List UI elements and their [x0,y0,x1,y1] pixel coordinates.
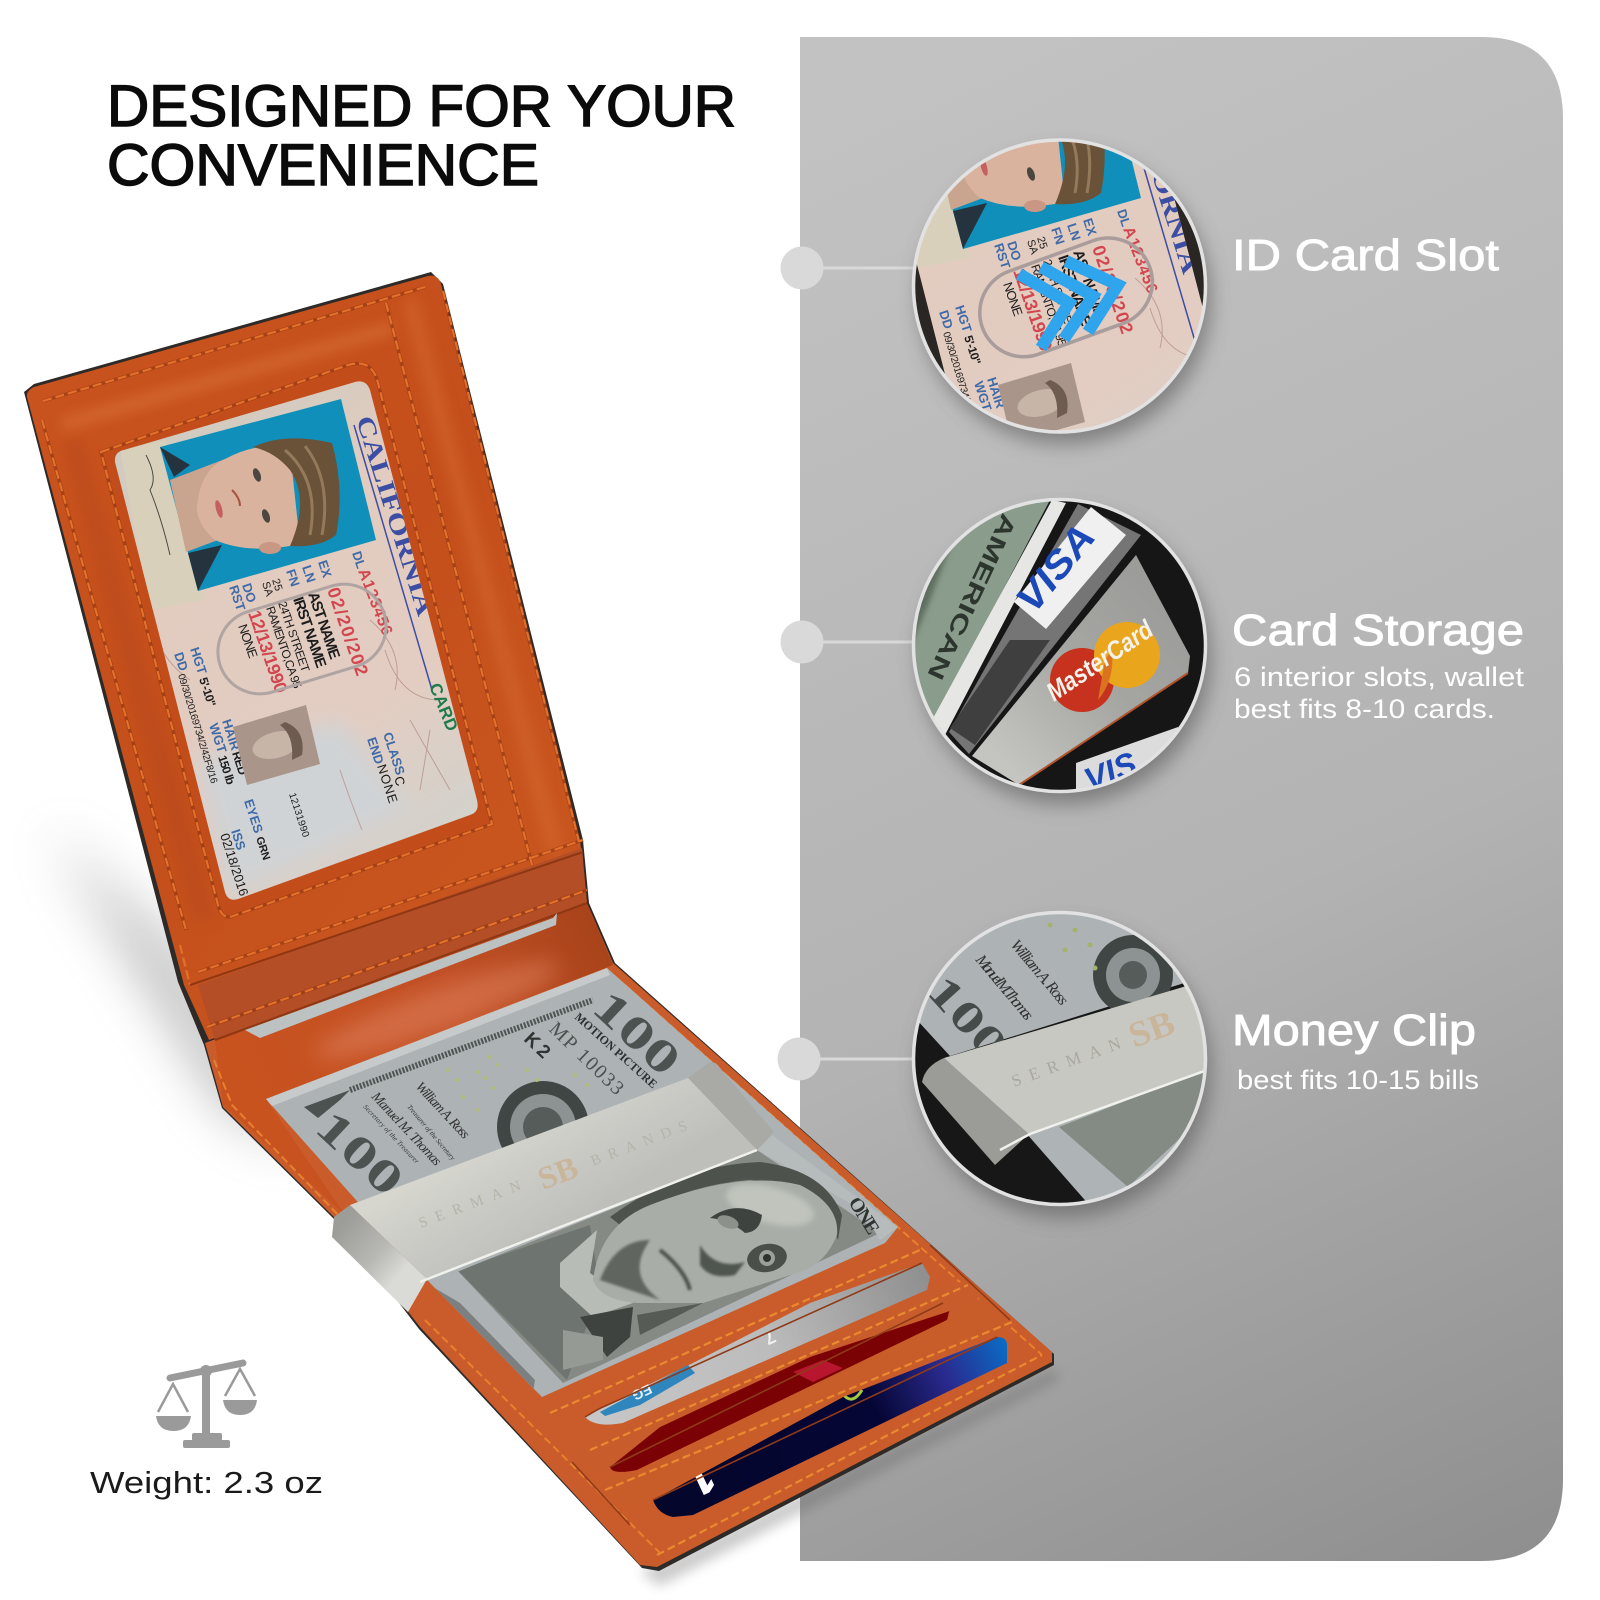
clip bend [922,1058,1030,1165]
card label: CARD [425,680,462,734]
flap stitching shadow [42,287,587,1027]
card fields: RED [229,750,250,777]
card fields: C [391,774,408,788]
card fields: 02/18/2016 [217,831,251,898]
strap: red to navy [590,1295,1010,1510]
ID detail content: 02/20/202 [1088,243,1137,336]
dark under chin [580,1307,633,1357]
strap: silver to red [575,1280,985,1480]
clip engraving BRANDS: BRANDS [589,1118,690,1170]
card storage ring [914,500,1206,792]
card fields: NONE [235,622,261,660]
panel: grey features background [800,37,1563,1561]
ID detail content: EX [1080,216,1100,238]
clip back tab [688,1062,774,1150]
lower visa text: VIS [1079,744,1142,798]
card fields: EYES [241,797,266,835]
card fields: 12/13/1990 [244,608,291,696]
card fields: HGT [187,645,210,676]
wallet shadow [50,830,1058,1586]
wallet outer silhouette [24,272,1054,1571]
bill top border [350,1000,593,1090]
clip band [350,1078,757,1279]
inner pocket sheen [308,947,566,1073]
card pattern: lower dotted area [195,720,410,895]
money clip content [905,905,1210,1215]
weight label: Weight: 2.3 oz [90,1465,323,1500]
card fields: EX [315,558,335,580]
red card stripe [793,1360,843,1382]
state underline [354,425,432,690]
bill K2: K2 [520,1028,554,1063]
card fields: RAMENTO,CA 95 [263,604,305,691]
inner pocket [215,903,613,1215]
bill face [266,968,898,1397]
VISA text: VISA [1008,517,1104,621]
card fields [171,549,408,898]
cravat [563,1330,603,1370]
lower bill [1026,1060,1210,1215]
card base [114,381,478,900]
eye right [747,1244,787,1272]
mouth [660,1250,690,1290]
right light margin [757,1135,898,1240]
ID detail content: LN [1064,221,1084,242]
card storage content [915,501,1204,790]
ID detail content: 5'-10" [961,334,984,366]
lower bill portrait [1059,1068,1210,1187]
ID detail content: RST [991,241,1013,271]
card fields: IRST NAME [289,595,329,670]
visa card [949,504,1141,754]
red card [610,1303,950,1472]
title [107,74,736,198]
card fields: 25 [269,577,284,593]
engraved background [457,1150,880,1383]
ID detail ring [914,140,1206,432]
Franklin portrait [433,1135,898,1392]
card fields: RST [226,583,248,613]
signature [146,455,170,555]
bill motion picture text: MOTION PICTURE [572,1010,660,1091]
ID detail content: DO [1004,239,1024,262]
ID detail content: DD [936,308,956,331]
lower page gap [433,1287,535,1392]
pocket stitching [550,1250,1042,1555]
mastercard text: MasterCard [1041,613,1159,707]
bill seal [497,1081,589,1173]
card fields: HAIR [219,717,243,753]
logo: SB [1123,1002,1180,1056]
white stripe [931,500,1066,735]
title: DESIGNED FOR YOUR [107,74,736,139]
ID detail content: 24TH STREET [1040,257,1078,333]
description: Money Clip: best fits 10-15 bills [1237,1065,1479,1095]
ID detail content: HGT [952,303,975,334]
seal [1093,935,1173,1015]
fold strap lines [190,852,587,1040]
visa card dark lower [950,640,1050,745]
ID detail content: AST NAME [1069,248,1108,319]
ID detail content: IRST NAME [1054,253,1094,328]
collar [560,1230,633,1317]
card fields: 02/20/202 [323,585,372,678]
clip lower highlight [420,1150,757,1282]
state name: CALIFORNIA [350,413,439,619]
green dots [1048,922,1098,970]
ID detail content [915,142,1204,430]
note text ONE: ONE [844,1193,884,1239]
photo background [160,399,376,591]
card fields: END [364,735,387,766]
bill signatures [362,1079,473,1170]
card pattern: map lines [150,620,450,830]
ID detail content: FN [1048,225,1068,246]
leather top flap [27,276,587,1040]
card fields: DO [239,581,259,604]
title: CONVENIENCE [107,133,539,198]
card fields: WGT [206,721,230,755]
card fields: 5'-10" [196,676,219,708]
card fields: 150 lb [215,754,238,786]
signatures: William A. Ross [1007,937,1071,1009]
card fields: AST NAME [304,590,343,661]
connector: money clip [778,1038,912,1080]
clip shape [944,979,1210,1135]
silver card [585,1263,930,1425]
card fields: DL [349,549,369,570]
upper bill [905,905,1210,1056]
label: Money Clip: Money Clip [1232,1006,1476,1055]
bill text: AMERICAN [922,510,1022,684]
signatures [971,937,1071,1024]
bill corner numeral left: 100 [306,1100,414,1206]
clip curved end [332,1205,427,1312]
bill top edge [266,968,610,1106]
navy card [653,1337,1007,1517]
ID detail content: RAMENTO,CA 95 [1028,262,1070,349]
bill shading [905,520,960,660]
bill green dots [446,1055,589,1112]
card fields: NONE [374,762,401,805]
money clip [332,1062,774,1312]
flap highlights [62,300,555,920]
hair [610,1162,842,1240]
label: Card Storage: Card Storage [1232,606,1524,655]
card fields: 09/30/20169734/2/42F8/16 [175,673,219,785]
circle: card storage detail [905,495,1210,800]
circle: money clip detail [905,905,1210,1215]
clip engraving SERMAN: SERMAN [417,1178,523,1232]
ID detail content: CALIFORNIA [1115,71,1204,277]
card fields: LN [299,563,319,584]
card fields: FN [283,567,303,588]
money clip ring [914,912,1206,1204]
ID detail content: WGT [971,379,995,413]
green bill [915,502,1050,716]
window surround [101,363,492,917]
mastercard lower edge [1019,673,1188,785]
mastercard card [972,555,1190,785]
navy card logo [843,1390,862,1399]
signatures: Manuel M. Thomas [971,951,1036,1024]
circle: ID card detail [912,138,1208,434]
card slots [585,1263,1007,1517]
weight icon: scales [156,1363,257,1448]
card fields: 24TH STREET [275,599,313,675]
bill signatures: Manuel M. Thomas [367,1089,444,1170]
fold strap [198,848,587,1040]
eye left [710,1208,762,1233]
bill serial text: MP 10033 [545,1018,628,1100]
card fields: ISS [228,827,249,852]
bill signatures: Treasurer of the Secretary [405,1103,457,1163]
visa label [1014,507,1126,629]
bill signatures: William A. Ross [412,1079,473,1143]
card fields: CLASS [380,730,408,777]
bill stack [266,968,898,1397]
ID card in window [114,381,478,900]
chevrons [1019,261,1118,348]
card fields: 12131990 [286,792,311,839]
card fields: SA [259,580,275,599]
face [593,1180,837,1303]
ID detail content: DL [1114,207,1134,228]
silver card blue strip [600,1365,695,1416]
card pattern: signature area [120,440,205,610]
forehead highlight [726,1180,814,1227]
card fields: A123456 [354,566,395,638]
nose shadow [700,1245,745,1276]
mastercard logo [1050,622,1160,712]
ID detail content: 09/30/20169734/2/42F8/16 [940,331,984,443]
silver card mark: 7 [761,1326,779,1349]
pocket edges [572,1245,1010,1525]
clip logo: SB [533,1149,583,1197]
bill corner ornament [304,1090,350,1118]
ID detail content: 25 [1034,235,1049,251]
leather bottom panel [205,903,1052,1567]
connector: ID card slot [780,246,915,290]
lower visa [1076,727,1210,800]
navy card numeral: 1 [683,1456,720,1503]
silver card label: EG [629,1381,655,1404]
flap stitching [42,287,587,1027]
portrait [160,438,340,591]
ID detail content: NONE [1000,280,1026,318]
description: Card Storage: 6 interior slots, wallet [1234,662,1525,692]
ID detail content: SA [1024,238,1040,257]
pocket straps [575,1280,1010,1510]
card fields: DD [171,650,191,673]
cheek shading [600,1240,660,1300]
lower panel edge stitching [214,985,1042,1553]
label: ID Card Slot: ID Card Slot [1232,231,1499,280]
circle shadows [919,152,1211,1217]
engraving: SERMAN [1009,1034,1123,1091]
grey card sliver [245,913,557,1038]
hologram stadium [216,582,388,696]
bill corner numeral right: 100 [583,980,691,1086]
card fields: GRN [253,835,272,862]
jacket [457,1225,600,1380]
numeral: 100 [918,966,1018,1069]
bill signatures: Secretary of the Treasurer [362,1103,421,1166]
connector: card storage [780,620,915,664]
description: Card Storage: best fits 8-10 cards. [1234,694,1495,724]
bow shadow [637,1303,703,1335]
description: Card Storage [1234,662,1525,724]
clip edge highlight [1000,1069,1210,1150]
ghost portrait [233,705,320,785]
ID detail content: 12/13/1990 [1009,266,1056,354]
ID detail content: A123456 [1119,224,1160,296]
ID detail content: HAIR [984,375,1008,411]
